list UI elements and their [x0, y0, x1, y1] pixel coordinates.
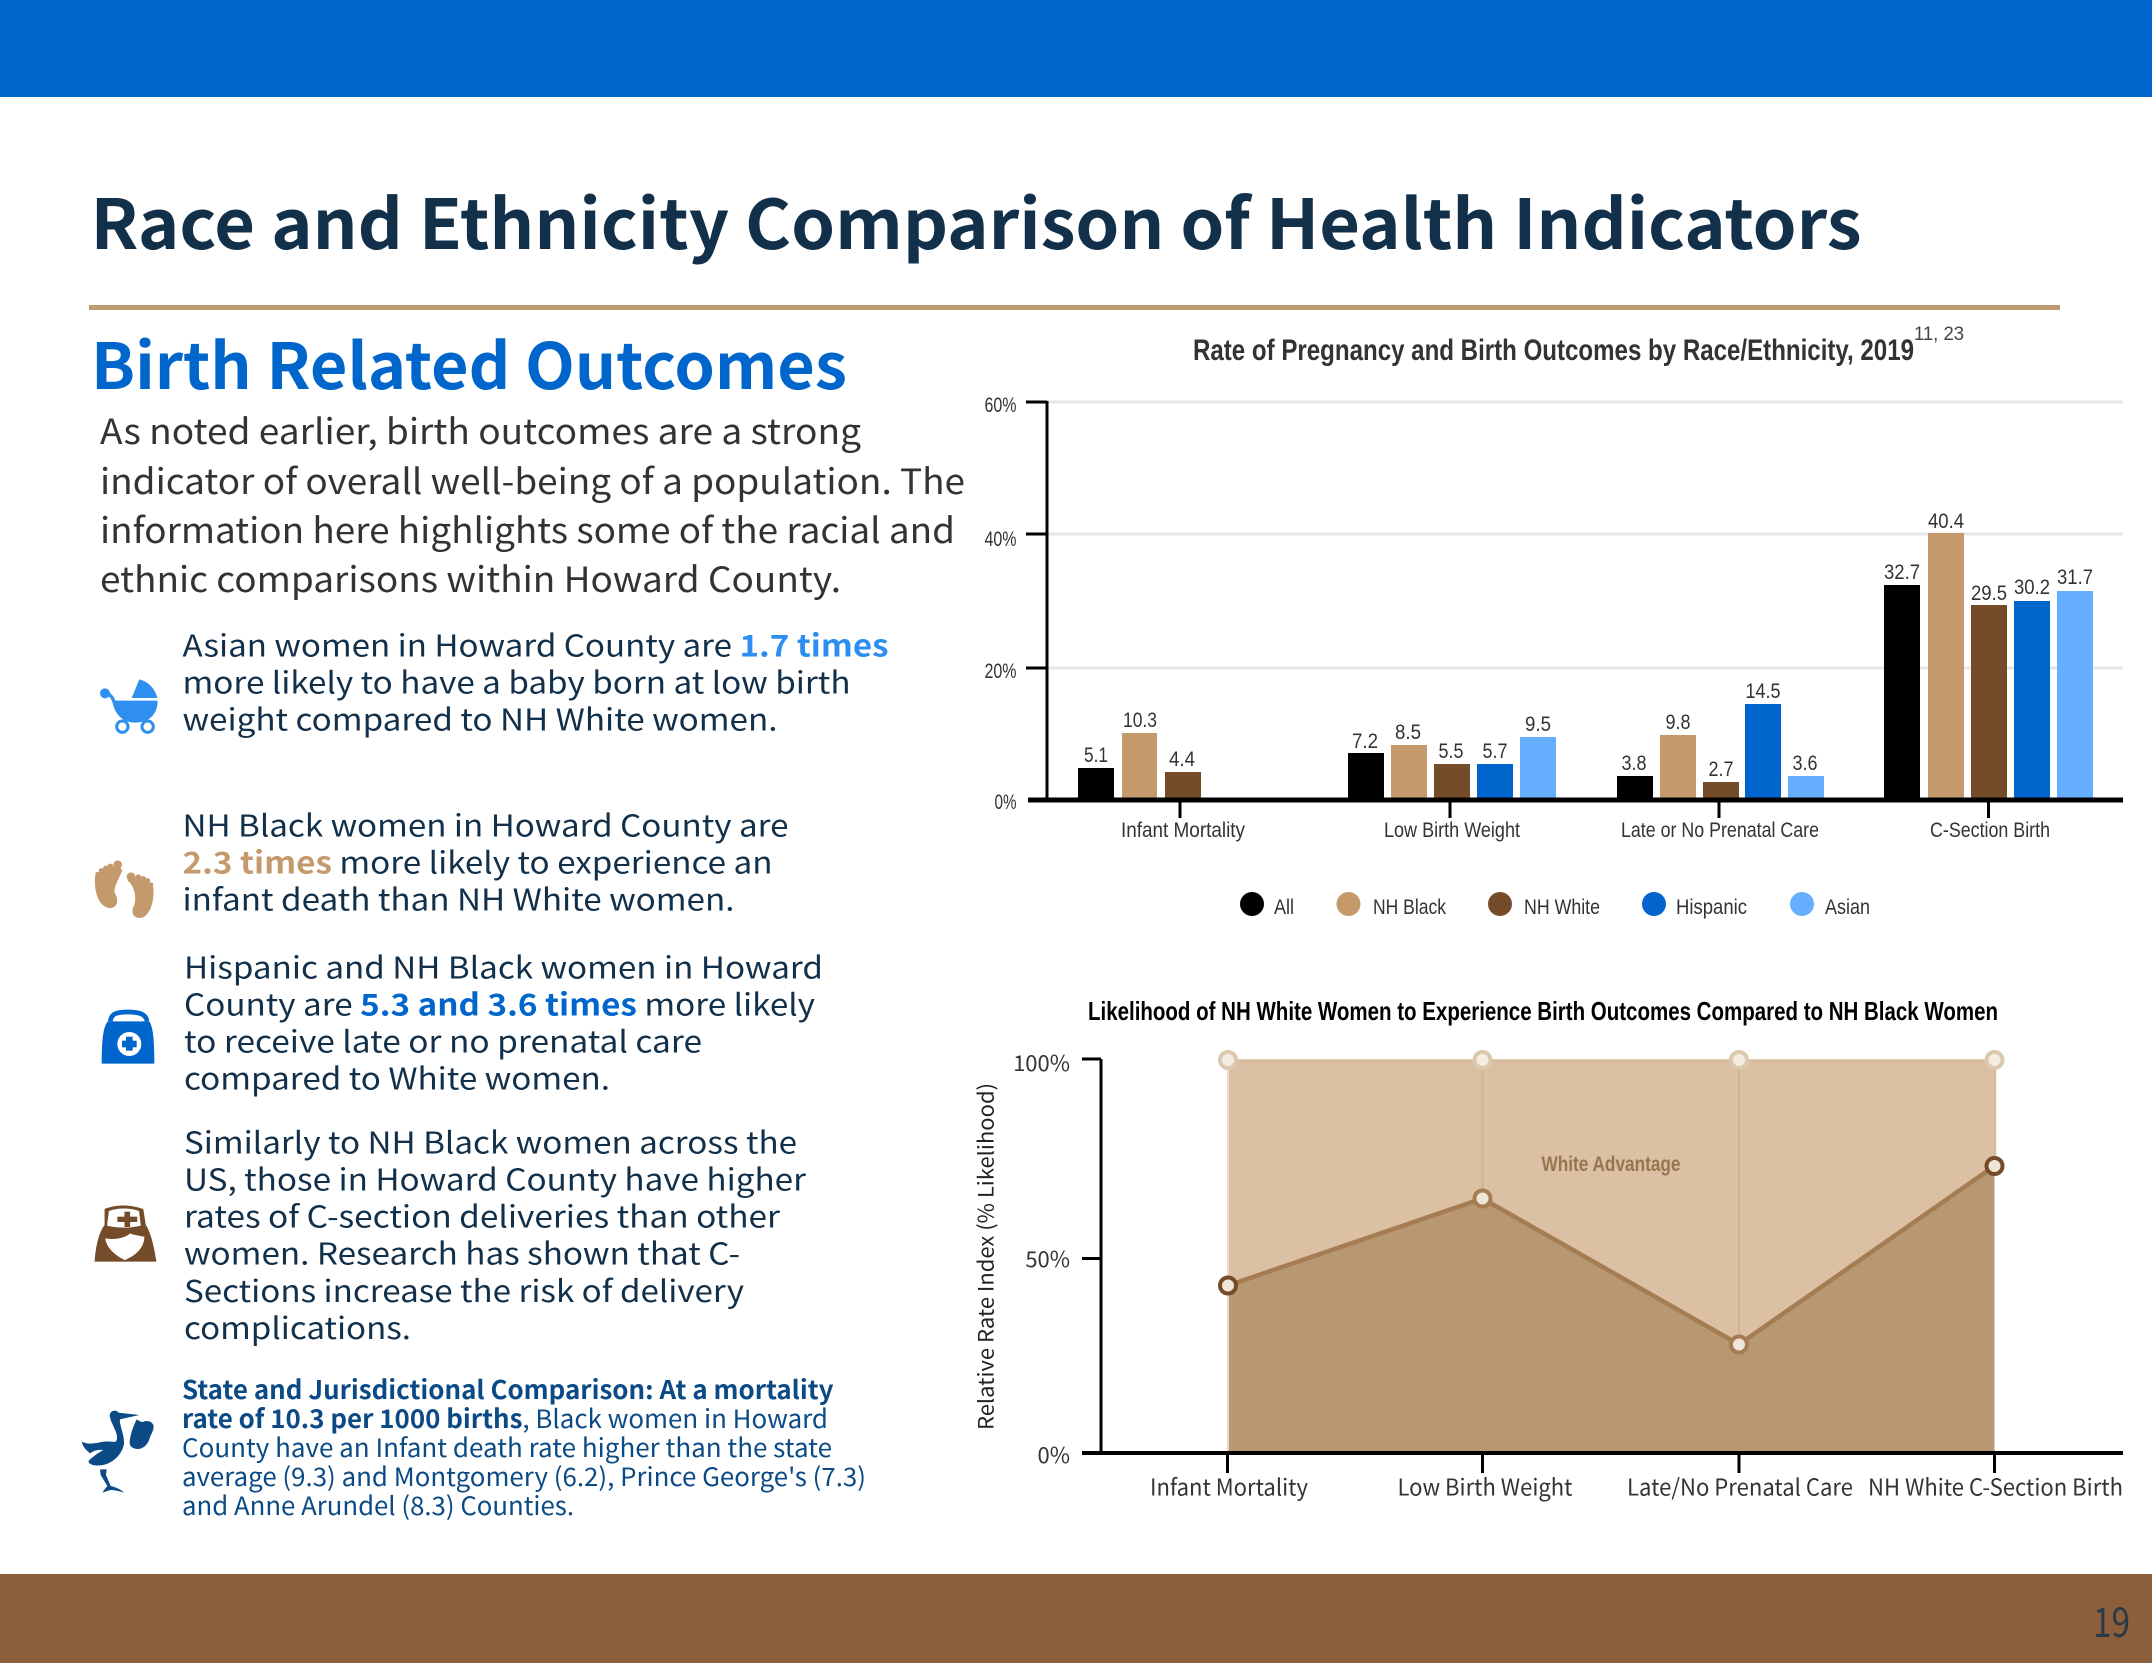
- icon: baby feet: [95, 860, 153, 918]
- bars: Late or No Prenatal Care: 3.8: [1622, 752, 1646, 775]
- intro paragraph: [100, 404, 965, 603]
- bars: Infant Mortality: 5.1: [1084, 744, 1108, 767]
- y axis labels: 20%: [984, 660, 1016, 683]
- x axis labels: Late/No Prenatal Care: [1627, 1468, 1853, 1502]
- legend: NH Black: [1373, 896, 1446, 919]
- legend: NH White: [1524, 896, 1600, 919]
- footer band: [0, 1574, 2152, 1663]
- chart title: Rate of Pregnancy and Birth Outcomes by Race/Ethnicity, 2019: [1193, 334, 1914, 367]
- legend: All: [1274, 896, 1294, 919]
- x axis labels: [1150, 1468, 2123, 1502]
- y axis labels: [1013, 1046, 1070, 1470]
- icon: baby stroller: [100, 679, 158, 732]
- title: Race and Ethnicity Comparison of Health Indicators: [90, 170, 1861, 269]
- x axis labels: C-Section Birth: [1930, 819, 2050, 842]
- bars: C-Section Birth: 29.5: [1971, 582, 2007, 605]
- item: Hispanic and NH Black late prenatal care: to receive late or no prenatal care: [184, 1018, 702, 1062]
- x axis labels: Infant Mortality: [1121, 819, 1245, 842]
- x axis labels: NH White C-Section Birth: [1868, 1468, 2123, 1502]
- bars: Low Birth Weight: 7.2: [1352, 730, 1378, 753]
- area chart: likelihood of NH White women compared to NH Black women: [970, 996, 2123, 1502]
- bars: Low Birth Weight: 8.5: [1395, 721, 1421, 744]
- item: NH Black women infant death: [95, 802, 789, 920]
- bars: C-Section Birth: 32.7: [1884, 561, 1920, 584]
- intro paragraph: As noted earlier, birth outcomes are a strong: [100, 404, 861, 455]
- item: state and jurisdictional comparison: State and Jurisdictional Comparison: At a mortality: [182, 1370, 834, 1407]
- item: state and jurisdictional comparison: and Anne Arundel (8.3) Counties.: [182, 1486, 574, 1523]
- bars: C-Section Birth: 31.7: [2057, 566, 2093, 589]
- heading: Birth Related Outcomes: Birth Related Outcomes: [91, 316, 847, 408]
- header band: [0, 0, 2152, 97]
- intro paragraph: ethnic comparisons within Howard County.: [100, 552, 841, 603]
- item: state and jurisdictional comparison: rate of 10.3 per 1000 births, Black women in Howard: [182, 1399, 828, 1436]
- legend: [1240, 892, 1870, 919]
- bars: Low Birth Weight: [1348, 713, 1556, 800]
- item: NH Black women infant death: NH Black women in Howard County are: [182, 802, 788, 846]
- bars: Infant Mortality: 10.3: [1123, 709, 1157, 732]
- item: Hispanic and NH Black late prenatal care: County are 5.3 and 3.6 times more likely: [184, 980, 815, 1024]
- bars: C-Section Birth: [1884, 510, 2093, 800]
- y axis labels: 100%: [1013, 1046, 1070, 1078]
- intro paragraph: information here highlights some of the racial and: [100, 503, 955, 554]
- top markers: [1220, 1052, 2002, 1068]
- y axis labels: 60%: [984, 394, 1016, 417]
- callout: White Advantage: White Advantage: [1542, 1153, 1680, 1176]
- y axis labels: 50%: [1025, 1242, 1070, 1274]
- item: state and jurisdictional comparison: [82, 1370, 866, 1523]
- item: Asian women low birth weight: [100, 622, 889, 740]
- page number: 19: [2093, 1589, 2130, 1649]
- item: NH Black women infant death: 2.3 times more likely to experience an: [182, 838, 772, 882]
- item: Asian women low birth weight: more likely to have a baby born at low birth: [182, 658, 850, 702]
- bars: Late or No Prenatal Care: [1617, 680, 1824, 800]
- axes: [1082, 1059, 1994, 1473]
- item: C-section deliveries: complications.: [184, 1304, 411, 1348]
- x axis labels: [1121, 819, 2050, 842]
- bar chart: rate of pregnancy and birth outcomes: [984, 324, 2123, 919]
- lower area: NH White rate: [1228, 1166, 1994, 1453]
- intro paragraph: indicator of overall well-being of a population. The: [100, 454, 965, 505]
- y axis labels: 0%: [1038, 1438, 1070, 1470]
- x axis labels: Low Birth Weight: [1384, 819, 1520, 842]
- axes: [1026, 401, 1988, 818]
- bars: Late or No Prenatal Care: 14.5: [1746, 680, 1780, 703]
- item: Hispanic and NH Black late prenatal care: Hispanic and NH Black women in Howard: [184, 944, 823, 988]
- citation superscript: 11, 23: [1914, 324, 1964, 345]
- upper area: NH Black reference: [1228, 1061, 1994, 1453]
- bars: Late or No Prenatal Care: 3.6: [1792, 752, 1818, 775]
- y axis labels: [984, 394, 1016, 814]
- icon: nurse: [95, 1205, 156, 1262]
- y axis labels: 0%: [994, 791, 1016, 814]
- item: C-section deliveries: women. Research has shown that C-: [184, 1230, 740, 1274]
- y axis title: Relative Rate Index (% Likelihood): [970, 1083, 1000, 1430]
- item: Hispanic and NH Black late prenatal care: compared to White women.: [184, 1054, 610, 1098]
- icon: stork carrying baby: [82, 1411, 154, 1493]
- y axis labels: 40%: [984, 528, 1016, 551]
- bars: C-Section Birth: 40.4: [1928, 510, 1964, 533]
- item: Asian women low birth weight: Asian women in Howard County are 1.7 times: [182, 622, 889, 666]
- icon: medical bag: [102, 1012, 154, 1064]
- bars: Low Birth Weight: 9.5: [1525, 713, 1551, 736]
- line markers: [1220, 1158, 2002, 1352]
- bars: Infant Mortality: 4.4: [1169, 748, 1195, 771]
- bars: Low Birth Weight: 5.5: [1438, 740, 1464, 763]
- item: C-section deliveries: [95, 1118, 806, 1348]
- legend: Hispanic: [1676, 896, 1747, 919]
- item: state and jurisdictional comparison: County have an Infant death rate higher than the state: [182, 1428, 832, 1465]
- item: Hispanic and NH Black late prenatal care: [102, 944, 823, 1098]
- bars: Late or No Prenatal Care: 2.7: [1708, 758, 1734, 781]
- x axis labels: Infant Mortality: [1150, 1468, 1308, 1502]
- legend: Asian: [1825, 896, 1870, 919]
- item: C-section deliveries: rates of C-section deliveries than other: [184, 1192, 780, 1236]
- bars: Late or No Prenatal Care: 9.8: [1666, 711, 1690, 734]
- item: NH Black women infant death: infant death than NH White women.: [182, 876, 734, 920]
- item: C-section deliveries: Similarly to NH Black women across the: [184, 1118, 797, 1162]
- left column: birth related outcomes: [82, 316, 965, 1523]
- item: state and jurisdictional comparison: average (9.3) and Montgomery (6.2), Prince George's (7.3): [182, 1457, 866, 1494]
- x axis labels: Late or No Prenatal Care: [1621, 819, 1819, 842]
- bars: Infant Mortality: [1078, 709, 1201, 800]
- item: C-section deliveries: US, those in Howard County have higher: [184, 1156, 806, 1200]
- item: C-section deliveries: Sections increase the risk of delivery: [184, 1267, 744, 1311]
- line: NH White: [1228, 1166, 1994, 1344]
- x axis labels: Low Birth Weight: [1398, 1468, 1573, 1502]
- bars: C-Section Birth: 30.2: [2014, 576, 2050, 599]
- bars: Low Birth Weight: 5.7: [1482, 740, 1508, 763]
- item: Asian women low birth weight: weight compared to NH White women.: [182, 696, 778, 740]
